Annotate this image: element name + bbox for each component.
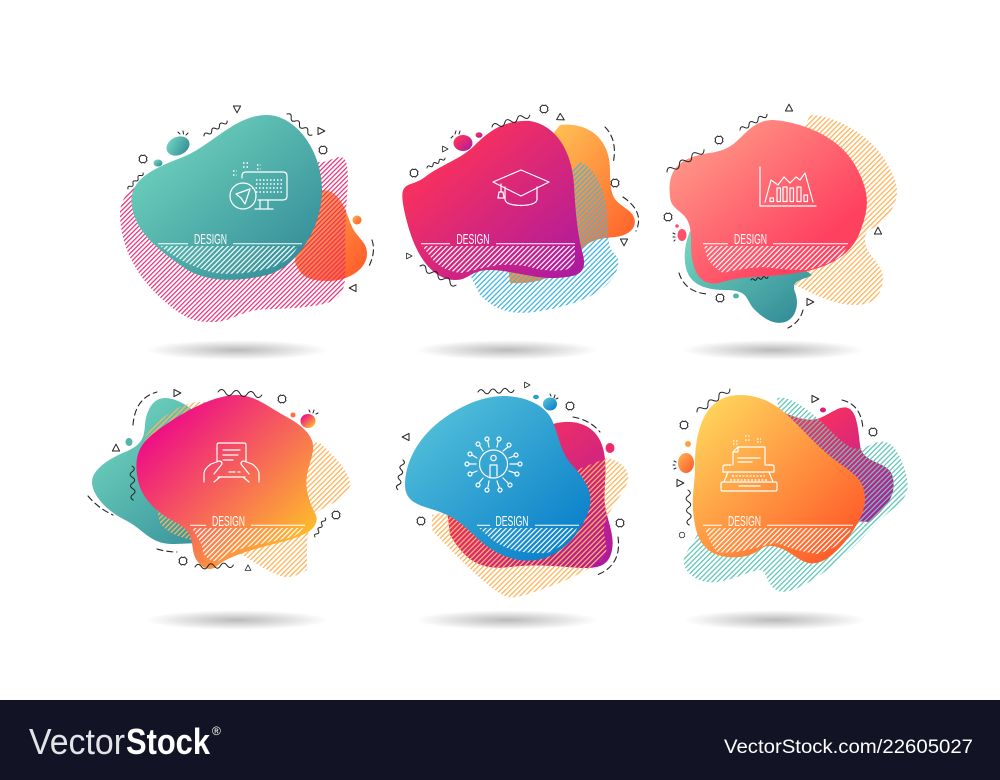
label: design	[477, 514, 579, 530]
coral main blob	[670, 120, 867, 284]
drops	[454, 132, 482, 151]
teal blob	[685, 225, 812, 323]
yellow hatched blob	[145, 402, 350, 577]
panel: document in hands magenta	[88, 389, 350, 630]
teal main blob	[131, 115, 322, 280]
small doodles	[407, 105, 639, 287]
label: design: DESIGN	[728, 514, 761, 530]
floor shadow	[415, 610, 599, 630]
logo: VectorStock: ®	[212, 724, 221, 738]
floor shadow	[683, 610, 867, 630]
orange main blob	[693, 395, 865, 563]
magenta main blob	[136, 395, 317, 569]
hatch band	[192, 528, 303, 562]
label: design: DESIGN	[496, 514, 528, 530]
icon: typewriter	[721, 436, 777, 491]
hatch band	[479, 528, 577, 553]
pink hatched blob	[120, 157, 348, 322]
icon: graduation cap	[493, 170, 549, 206]
blue main blob	[405, 396, 590, 561]
drops	[533, 395, 614, 453]
panel: graduation cap red	[402, 105, 639, 360]
small doodles	[673, 387, 877, 538]
floor shadow	[145, 340, 329, 360]
yellow hatched blob	[432, 458, 628, 598]
label: design: DESIGN	[194, 232, 227, 248]
icon: info network	[465, 437, 522, 492]
panel: information network blue	[396, 382, 628, 630]
logo: VectorStock: Stock	[126, 721, 211, 762]
panel: monitor cursor teal	[120, 106, 373, 360]
hatch band	[160, 246, 298, 274]
icon: hands holding document	[204, 443, 259, 482]
drops	[126, 412, 316, 446]
magenta blob	[770, 407, 894, 522]
label: design: DESIGN	[734, 232, 767, 248]
teal blob	[92, 398, 250, 544]
logo: VectorStock	[29, 721, 221, 762]
orange blob	[295, 190, 367, 281]
floor shadow	[415, 340, 599, 360]
magenta blob	[447, 422, 613, 568]
panel: chart coral	[664, 104, 897, 360]
drops	[154, 133, 362, 224]
label: design: DESIGN	[212, 514, 245, 530]
yellow hatched blob	[780, 115, 897, 305]
red main blob	[402, 121, 584, 280]
blue hatched blob	[470, 162, 618, 313]
label: design: DESIGN	[456, 232, 490, 248]
panel: typewriter orange	[673, 387, 908, 630]
icon: line chart	[760, 167, 816, 206]
logo: VectorStock: Vector	[29, 721, 125, 762]
orange blob	[500, 125, 635, 283]
small doodles	[88, 389, 340, 570]
hatch band	[422, 246, 575, 273]
footer bar	[0, 700, 1000, 780]
teal hatched blob	[684, 398, 908, 592]
floor shadow	[681, 340, 865, 360]
small doodles	[396, 382, 624, 575]
small doodles	[127, 106, 373, 292]
icon: monitor with cursor	[230, 163, 287, 209]
small doodles	[664, 104, 882, 328]
drops	[678, 408, 826, 473]
label: design	[190, 514, 305, 530]
floor shadow	[145, 610, 329, 630]
hatch band	[704, 246, 847, 273]
hatch band	[705, 528, 851, 554]
image id: VectorStock.com/22605027	[724, 737, 973, 758]
drops	[675, 224, 739, 298]
